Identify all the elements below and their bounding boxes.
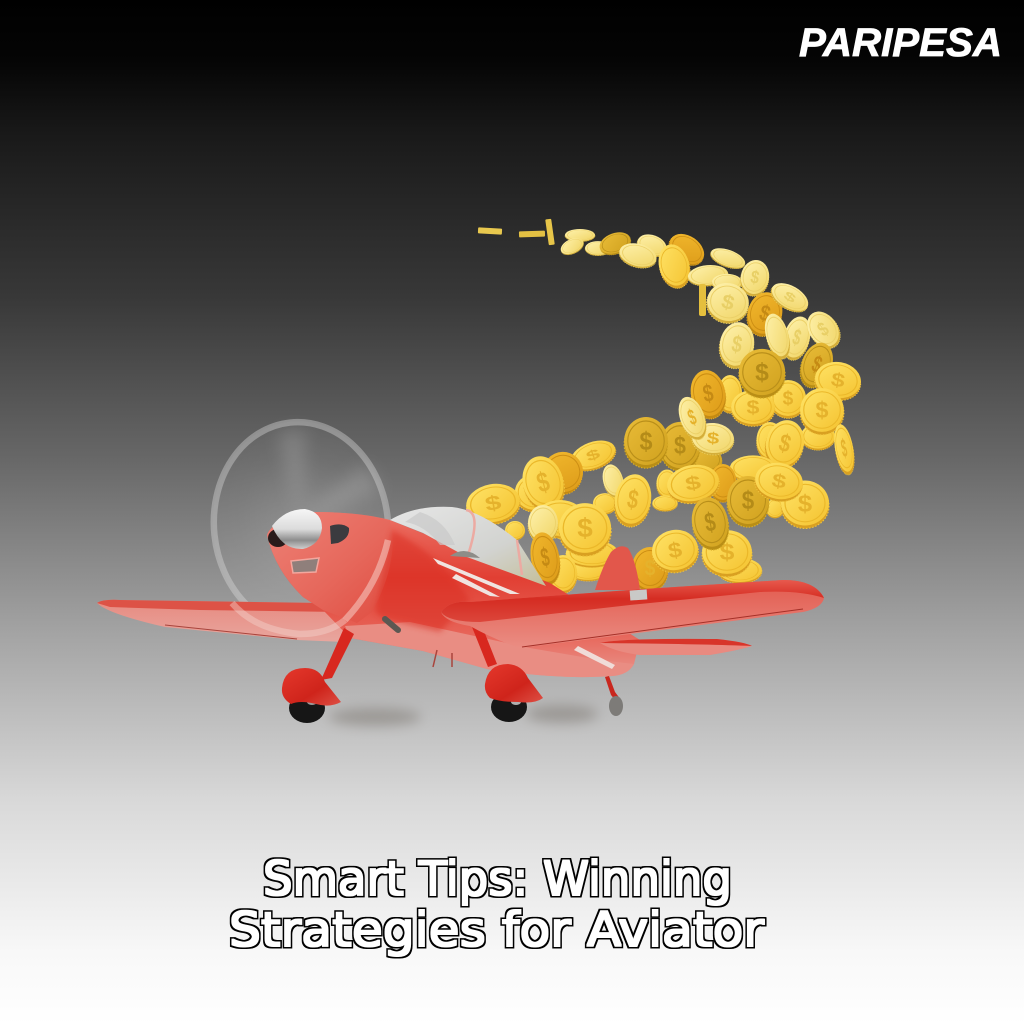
flying coins: middle cluster: $ xyxy=(625,483,641,515)
flying coins: middle cluster: $ xyxy=(747,398,760,418)
right wing xyxy=(441,580,824,648)
propeller ring crossing nose xyxy=(345,540,388,620)
flying coins: upper trail: $ xyxy=(757,301,773,327)
flying coins: middle cluster: $ xyxy=(674,431,686,459)
landing gear xyxy=(282,626,623,723)
flying coins: lower cluster behind the plane: $ xyxy=(538,541,552,573)
flying coins: lower cluster behind the plane: $ xyxy=(577,513,593,543)
flying coins: lower cluster behind the plane: $ xyxy=(534,467,553,499)
wing fitting xyxy=(630,589,647,601)
flying coins: upper trail: $ xyxy=(719,290,737,315)
exhaust pipe xyxy=(385,619,398,630)
flying coins: middle cluster: $ xyxy=(815,397,829,423)
right landing gear xyxy=(472,626,543,722)
aft fuselage stripe xyxy=(574,646,615,669)
flying coins: upper trail: $ xyxy=(730,331,744,358)
flying coins: middle cluster: $ xyxy=(755,359,769,386)
flying coins: upper trail: $ xyxy=(808,351,825,379)
flying coins: lower cluster behind the plane: $ xyxy=(666,537,684,563)
flying coins: lower cluster behind the plane: $ xyxy=(702,506,718,538)
flying coins: middle cluster: $ xyxy=(701,378,715,408)
nose opening xyxy=(268,529,288,547)
flying coins: upper trail: $ xyxy=(749,266,761,288)
air scoop xyxy=(291,558,319,573)
flying coins: lower cluster behind the plane: $ xyxy=(645,556,656,581)
flying coins: middle cluster: $ xyxy=(770,470,788,493)
flying coins: middle cluster: $ xyxy=(584,446,602,465)
flying coins: middle cluster xyxy=(567,349,864,530)
flying coins: lower cluster behind the plane: $ xyxy=(720,539,734,566)
left landing gear xyxy=(282,628,354,723)
logo: PARIPESA: PARIPESA xyxy=(799,21,1002,65)
cowling xyxy=(267,512,393,623)
airplane xyxy=(97,412,824,726)
belly xyxy=(345,622,634,677)
title: Strategies for Aviator xyxy=(229,903,765,958)
flying coins: lower cluster behind the plane: $ xyxy=(483,492,503,516)
flying coins: middle cluster: $ xyxy=(742,486,755,515)
fuselage white stripes xyxy=(433,558,520,597)
tailplane xyxy=(600,639,752,655)
flying coins: upper trail: $ xyxy=(813,317,833,341)
tail fin xyxy=(595,546,640,590)
flying coins: middle cluster: $ xyxy=(839,435,849,464)
flying coins: middle cluster: $ xyxy=(639,428,653,456)
underside antennae xyxy=(433,650,452,667)
spinner xyxy=(272,509,322,549)
flying coins: upper trail xyxy=(478,219,847,392)
flying coins: lower cluster behind the plane xyxy=(463,446,762,593)
flying coins: middle cluster: $ xyxy=(783,389,794,410)
canopy xyxy=(390,507,546,586)
flying coins: middle cluster: $ xyxy=(684,403,700,430)
fuselage xyxy=(267,512,640,677)
propeller disc xyxy=(203,412,399,640)
engine intake xyxy=(330,524,349,544)
stream of gold coins xyxy=(463,219,864,593)
flying coins: upper trail: $ xyxy=(781,288,799,306)
flying coins: upper trail: $ xyxy=(790,324,804,350)
flying coins: middle cluster: $ xyxy=(706,429,720,448)
flying coins: middle cluster: $ xyxy=(829,368,847,392)
flying coins: middle cluster: $ xyxy=(776,429,794,458)
flying coins: middle cluster: $ xyxy=(798,491,812,517)
flying coins: middle cluster: $ xyxy=(684,472,703,496)
tail wheel xyxy=(605,676,623,716)
title: Smart Tips: Winning xyxy=(263,852,732,907)
left wing xyxy=(97,600,352,642)
shaded flank xyxy=(375,530,470,632)
dust under wheels xyxy=(329,705,598,726)
title xyxy=(229,852,765,958)
